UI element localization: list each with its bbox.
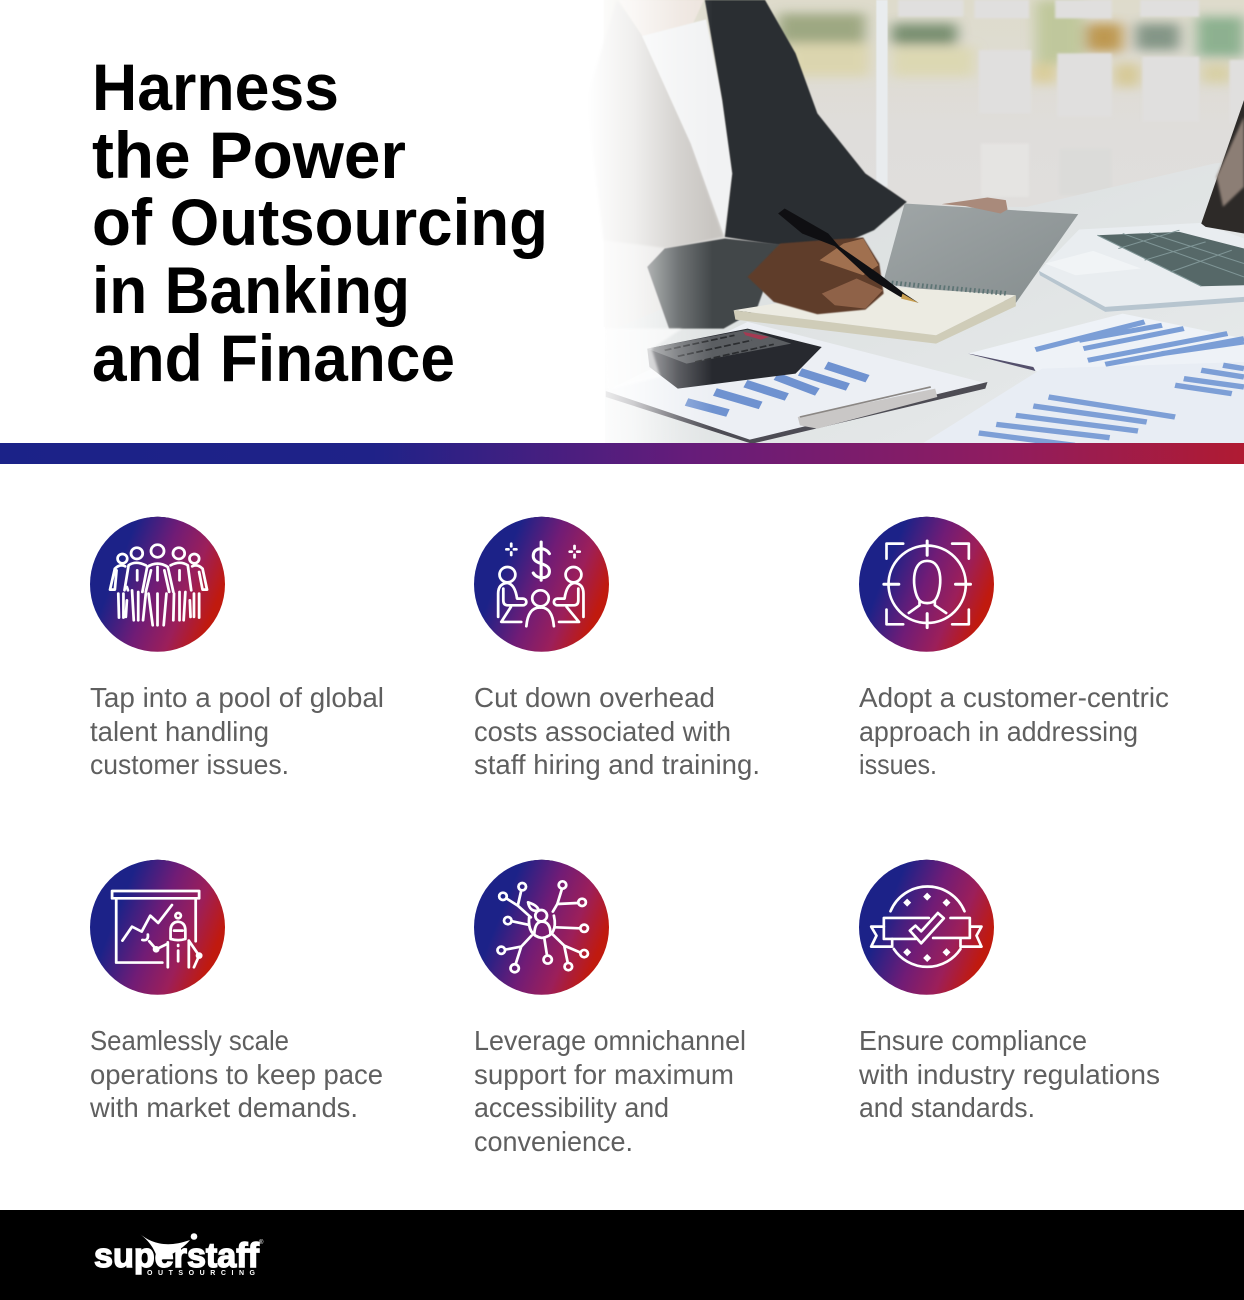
text: scale operations: with market demands. <box>89 1092 358 1123</box>
footer band <box>0 1210 1244 1300</box>
text: reduce overhead: costs associated with <box>474 716 731 747</box>
text: customer-centric: approach in addressing <box>859 716 1138 747</box>
panel: reduce overhead <box>474 517 760 780</box>
laptop <box>1039 223 1244 312</box>
text: compliance: and standards. <box>859 1092 1035 1123</box>
title: in Banking <box>92 253 410 327</box>
text: customer-centric <box>859 682 1169 780</box>
logo: superstaff outsourcing: ® <box>259 1239 264 1246</box>
text: scale operations: operations to keep pace <box>90 1059 383 1090</box>
text: omnichannel support: convenience. <box>474 1126 633 1157</box>
fingers behind cover <box>942 197 1008 214</box>
icon: customer in target <box>859 517 994 652</box>
text: reduce overhead <box>474 682 760 780</box>
title: and Finance <box>92 321 455 395</box>
text: omnichannel support: support for maximum <box>474 1059 734 1090</box>
icon: presenter at chart board <box>90 860 225 995</box>
panel: customer-centric <box>859 517 1169 780</box>
hand <box>748 238 884 314</box>
calculator <box>647 329 822 389</box>
right document <box>968 314 1244 372</box>
lower document <box>922 362 1244 444</box>
text: reduce overhead: Cut down overhead <box>474 682 715 713</box>
left fade to white <box>585 0 707 443</box>
text: omnichannel support <box>474 1025 746 1157</box>
title <box>92 50 548 395</box>
desk surface <box>850 164 1244 443</box>
icon: team of people <box>90 517 225 652</box>
gradient divider bar <box>0 443 1244 464</box>
text: global talent <box>90 682 384 780</box>
panel: global talent <box>90 517 384 780</box>
notebook cover <box>883 203 1078 303</box>
icon: meeting with dollar sign <box>474 517 609 652</box>
text: customer-centric: issues. <box>859 749 937 780</box>
logo: superstaff outsourcing: OUTSOURCING <box>147 1270 258 1277</box>
jacket: left pale side <box>636 38 724 248</box>
hero photo: businessperson writing at desk with charts, calculator and laptop <box>556 0 1244 447</box>
text: compliance <box>858 1025 1160 1123</box>
text: compliance: with industry regulations <box>858 1059 1160 1090</box>
notebook page <box>734 286 1016 335</box>
clipboard <box>650 322 984 440</box>
text: scale operations <box>89 1025 383 1123</box>
pen <box>778 209 919 303</box>
panel: omnichannel support <box>474 860 746 1157</box>
text: omnichannel support: Leverage omnichannel <box>474 1025 746 1056</box>
text: scale operations: Seamlessly scale <box>90 1025 289 1056</box>
logo: superstaff outsourcing: superstaff <box>94 1237 260 1275</box>
panel: scale operations <box>89 860 383 1123</box>
text: global talent: talent handling <box>90 716 269 747</box>
icon: ribbon badge with check mark <box>859 860 994 995</box>
text: global talent: Tap into a pool of global <box>90 682 384 713</box>
neck <box>641 0 704 35</box>
dark jacket <box>705 0 907 245</box>
title: of Outsourcing <box>92 185 548 259</box>
text: compliance: Ensure compliance <box>859 1025 1087 1056</box>
title: the Power <box>92 118 406 192</box>
icon: person with network nodes <box>474 860 609 995</box>
text: customer-centric: Adopt a customer-centric <box>859 682 1169 713</box>
title: Harness <box>92 50 339 124</box>
text: omnichannel support: accessibility and <box>474 1092 669 1123</box>
text: reduce overhead: staff hiring and training. <box>474 749 760 780</box>
panel: compliance <box>858 860 1160 1123</box>
shirt <box>642 19 732 235</box>
text: global talent: customer issues. <box>90 749 289 780</box>
